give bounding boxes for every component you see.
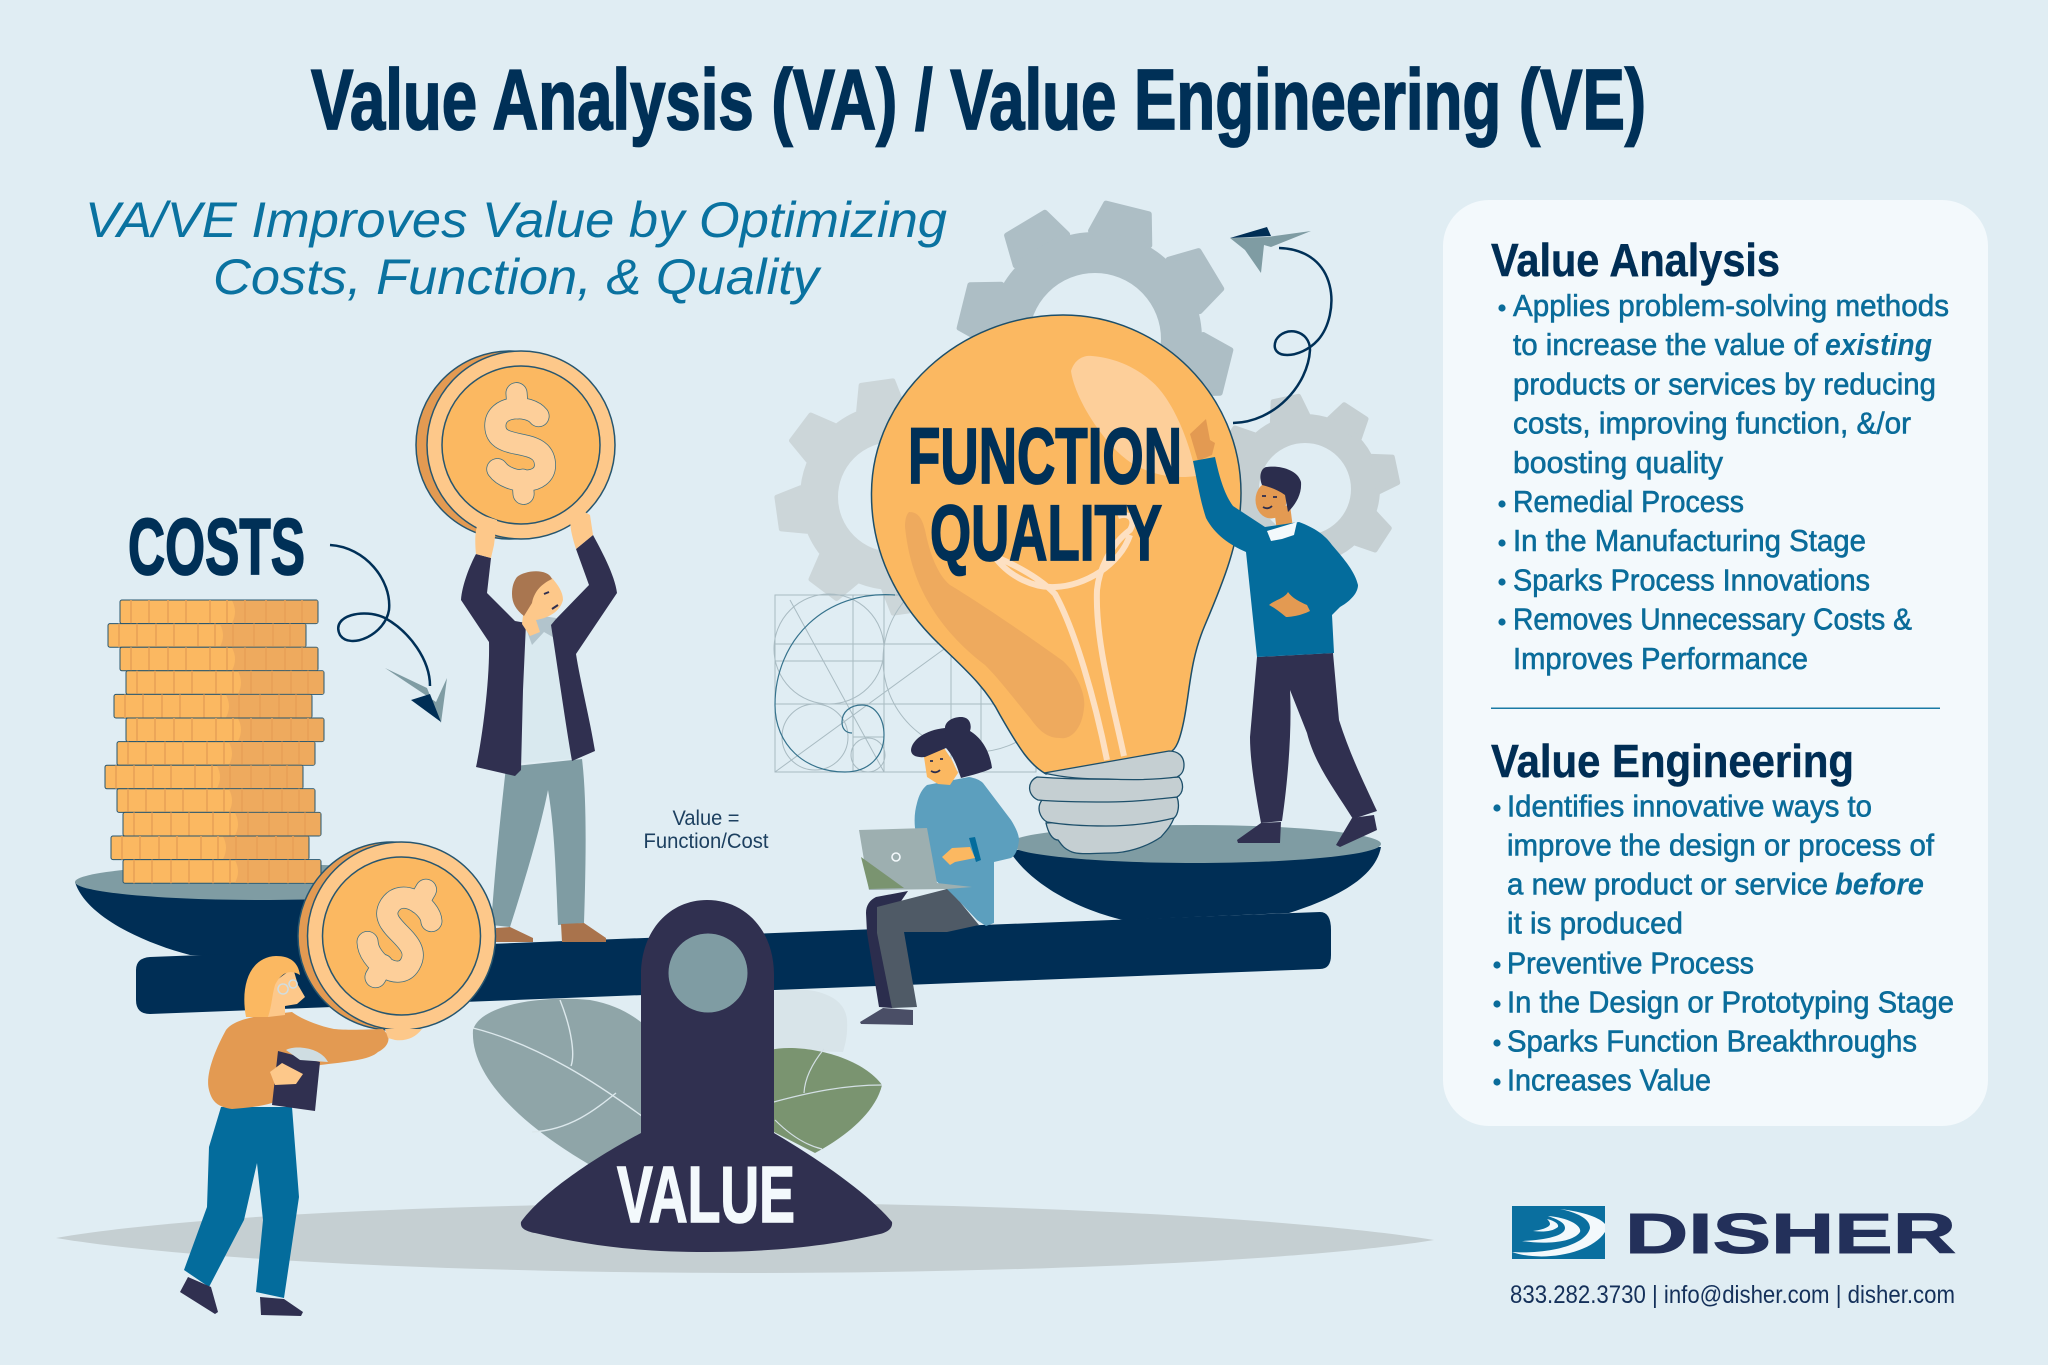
right scale pan bbox=[1009, 825, 1381, 920]
sweater bbox=[915, 777, 1019, 926]
list: value engineering bullets: improve the design or process of bbox=[1507, 828, 1934, 862]
list: value analysis bullets: costs, improving function, &/or bbox=[1513, 406, 1911, 441]
list: value analysis bullets: Sparks Process Innovations bbox=[1513, 562, 1870, 597]
hand on belly bbox=[1269, 592, 1310, 617]
list: value engineering bullets: before bbox=[1835, 866, 1924, 902]
COSTS label: COSTS bbox=[128, 502, 305, 591]
left scale pan bbox=[75, 864, 447, 960]
hair bbox=[244, 956, 300, 1017]
arrow: function curl bbox=[1233, 248, 1331, 423]
collar bbox=[524, 615, 558, 645]
shoes bbox=[1237, 815, 1377, 847]
list: value analysis bullets: to increase the value of bbox=[1513, 327, 1818, 362]
list: value engineering bullets: it is produced bbox=[1507, 906, 1683, 940]
heading: value analysis: Value Analysis bbox=[1491, 234, 1780, 286]
head bbox=[1256, 482, 1286, 518]
list: value analysis bullets: boosting quality bbox=[1513, 445, 1723, 480]
shadow bbox=[905, 512, 1084, 738]
hair bbox=[512, 571, 552, 616]
panel: definitions bbox=[1443, 200, 1988, 1126]
bulb glass bbox=[871, 315, 1241, 774]
face bbox=[924, 748, 958, 785]
leaf: pale bbox=[770, 989, 847, 1052]
formula note: Value = bbox=[672, 807, 740, 830]
laptop bbox=[859, 828, 972, 890]
back leg bbox=[866, 891, 908, 1008]
list: value engineering bullets: Preventive Process bbox=[1507, 946, 1754, 980]
icon: paper plane right bbox=[1230, 227, 1311, 273]
hand on coin bbox=[385, 1029, 422, 1040]
shirt bbox=[521, 623, 572, 763]
list: value analysis bullets: Applies problem-solving methods bbox=[1513, 288, 1949, 323]
person: man pointing bbox=[1190, 419, 1377, 847]
top coin bbox=[416, 351, 615, 539]
subtitle: Costs, Function, & Quality bbox=[213, 249, 822, 305]
hair bbox=[1260, 467, 1301, 512]
head bbox=[522, 578, 563, 636]
list: value engineering bullets: Sparks Function Breakthroughs bbox=[1507, 1024, 1917, 1058]
leaves bbox=[473, 989, 882, 1165]
arrow: costs curl bbox=[330, 545, 430, 686]
icon: paper plane left bbox=[385, 668, 447, 723]
sweater bbox=[1193, 457, 1358, 657]
neck bbox=[1274, 505, 1293, 532]
glasses bbox=[278, 980, 297, 994]
hair bbox=[911, 717, 992, 778]
paper bbox=[286, 1048, 328, 1062]
icon: large gear bbox=[958, 202, 1232, 469]
FUNCTION QUALITY label: FUNCTION bbox=[908, 411, 1182, 500]
subtitle bbox=[85, 192, 947, 305]
fulcrum bbox=[521, 900, 892, 1252]
cuff and hand bbox=[969, 837, 981, 862]
FUNCTION QUALITY label bbox=[908, 411, 1182, 577]
list: value analysis bullets bbox=[1498, 288, 1949, 676]
logo wordmark: DISHER bbox=[1625, 1202, 1956, 1266]
person: woman with laptop bbox=[859, 717, 1019, 1025]
list: value engineering bullets: Identifies innovative ways to bbox=[1507, 788, 1872, 824]
coin stack bbox=[105, 600, 324, 883]
sweater bbox=[208, 1012, 389, 1109]
shoes bbox=[496, 923, 606, 942]
icon: right gear bbox=[1218, 395, 1399, 583]
front leg bbox=[877, 889, 979, 1008]
list: value analysis bullets: Removes Unnecessary Costs & bbox=[1513, 602, 1912, 637]
subtitle: VA/VE Improves Value by Optimizing bbox=[85, 192, 947, 248]
heading: value engineering: Value Engineering bbox=[1491, 735, 1854, 787]
person: man holding coin bbox=[461, 508, 617, 942]
clipboard bbox=[272, 1051, 320, 1111]
list: value analysis bullets: Remedial Process bbox=[1513, 484, 1744, 519]
light bulb bbox=[871, 315, 1241, 854]
highlight bbox=[1071, 356, 1196, 477]
hands bbox=[475, 508, 593, 558]
trousers bbox=[491, 759, 586, 927]
FUNCTION QUALITY label: QUALITY bbox=[930, 488, 1162, 577]
shoe bbox=[860, 1008, 913, 1025]
leaf: green bbox=[770, 1048, 882, 1153]
list: value engineering bullets: a new product or service bbox=[1507, 866, 1828, 902]
golden ratio spiral diagram bbox=[774, 568, 1067, 772]
screw base bbox=[1030, 751, 1184, 854]
icon: left gear bbox=[776, 380, 967, 614]
list: value engineering bullets: Increases Value bbox=[1507, 1062, 1711, 1098]
bottom coin bbox=[298, 842, 496, 1030]
list: value analysis bullets: existing bbox=[1825, 327, 1932, 362]
eyes and smile bbox=[1262, 496, 1277, 508]
eye and smile bbox=[544, 592, 558, 609]
formula note: Function/Cost bbox=[644, 830, 769, 853]
logo mark bbox=[1512, 1206, 1605, 1259]
pointing hand bbox=[1190, 419, 1215, 461]
title: Value Analysis (VA) / Value Engineering (VE) bbox=[311, 53, 1646, 148]
logo: Disher bbox=[1512, 1202, 1956, 1266]
list: value engineering bullets bbox=[1493, 788, 1954, 1098]
eyes and smile bbox=[930, 759, 943, 772]
person: woman with clipboard bbox=[180, 956, 422, 1316]
list: value engineering bullets: In the Design or Prototyping Stage bbox=[1507, 984, 1954, 1020]
formula note bbox=[644, 807, 769, 853]
list: value analysis bullets: Improves Performance bbox=[1513, 641, 1808, 676]
leaf: grey bbox=[473, 999, 650, 1165]
contact line: 833.282.3730 | info@disher.com | disher.com bbox=[1510, 1281, 1955, 1309]
seesaw beam bbox=[136, 912, 1331, 1014]
shoes bbox=[180, 1277, 303, 1316]
jeans bbox=[184, 1107, 299, 1298]
list: value analysis bullets: In the Manufacturing Stage bbox=[1513, 523, 1866, 558]
face bbox=[268, 968, 305, 1017]
ground shadow bbox=[56, 1203, 1434, 1273]
VALUE label: VALUE bbox=[617, 1150, 795, 1239]
filament bbox=[994, 515, 1132, 760]
hand on clipboard bbox=[270, 1063, 303, 1085]
trousers bbox=[1250, 653, 1377, 823]
collar bbox=[1267, 522, 1297, 541]
list: value analysis bullets: products or services by reducing bbox=[1513, 366, 1936, 401]
jacket bbox=[461, 554, 526, 776]
